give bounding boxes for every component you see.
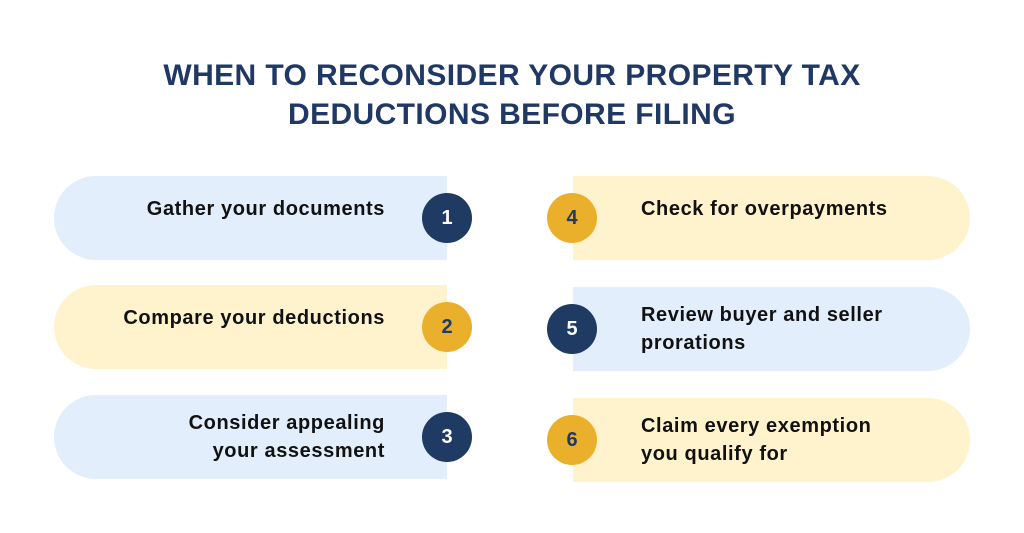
title bbox=[163, 59, 861, 131]
step 1 bbox=[54, 176, 447, 260]
step 5: prorations bbox=[641, 332, 746, 354]
step 2: 2 bbox=[441, 316, 453, 338]
step 2 bbox=[54, 285, 447, 369]
step 3 bbox=[54, 395, 447, 479]
step 1: 1 bbox=[441, 207, 453, 229]
step 3: Consider appealing bbox=[189, 412, 385, 434]
step 3: 3 bbox=[441, 426, 453, 448]
step 4 bbox=[573, 176, 970, 260]
step 6 bbox=[573, 398, 970, 482]
title: WHEN TO RECONSIDER YOUR PROPERTY TAX bbox=[163, 59, 861, 92]
step 6: Claim every exemption bbox=[641, 415, 871, 437]
text: 4 bbox=[566, 207, 578, 229]
step 5 bbox=[573, 287, 970, 371]
text: 5 bbox=[566, 318, 578, 340]
text: 6 bbox=[566, 429, 578, 451]
title: DEDUCTIONS BEFORE FILING bbox=[288, 98, 736, 131]
step 5: Review buyer and seller bbox=[641, 304, 883, 326]
step 4: Check for overpayments bbox=[641, 198, 888, 220]
step 3: your assessment bbox=[213, 440, 385, 462]
step 1: Gather your documents bbox=[147, 198, 385, 220]
step 2: Compare your deductions bbox=[123, 307, 385, 329]
step 6: you qualify for bbox=[641, 443, 788, 465]
